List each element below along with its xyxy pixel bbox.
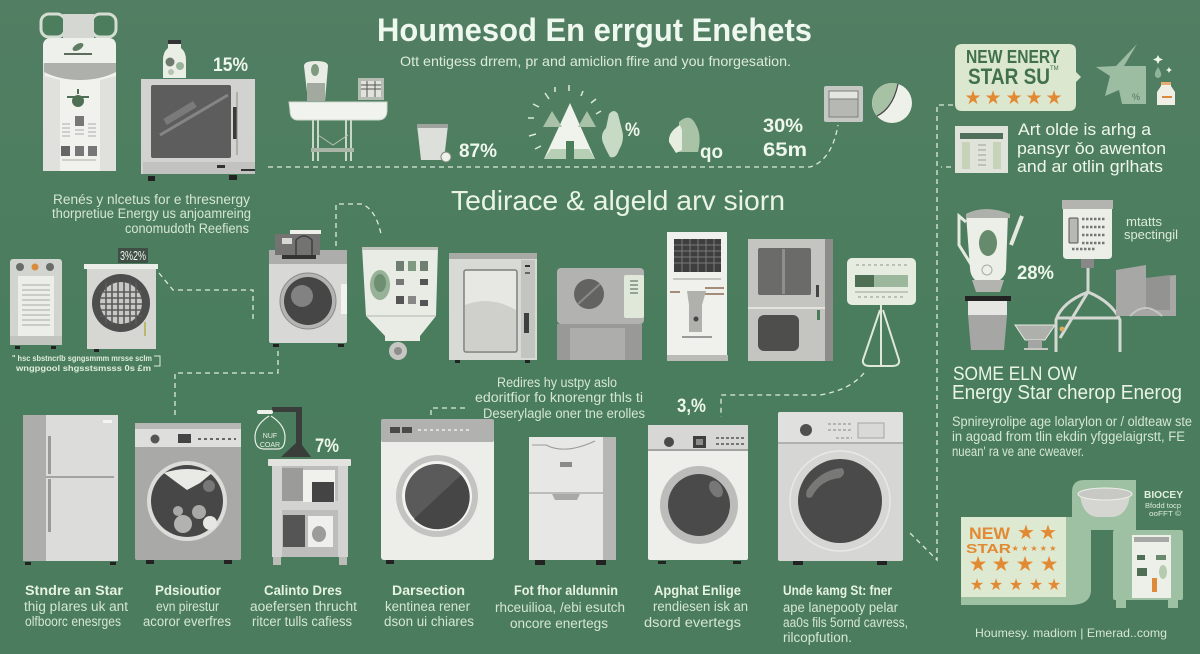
caption: appliance 7: Unde kamg St: fner	[783, 582, 892, 598]
icon: white washer	[381, 419, 494, 564]
star sign panel: ★ ★ ★ ★ ★	[1012, 544, 1056, 553]
caption: appliance 7	[783, 582, 908, 645]
icon: refrigerator	[23, 415, 118, 565]
caption: appliance 5	[495, 582, 625, 631]
green tube support	[961, 480, 1136, 605]
heading: right lower: SOME ELN OW	[953, 363, 1078, 385]
caption: appliance 5: rhceuilioa, /ebi esutch	[495, 600, 625, 615]
caption: appliance 4: Darsection	[392, 582, 465, 598]
stat: 15%: 15%	[213, 54, 248, 76]
icon: fridge unit	[449, 253, 537, 363]
icon: open box	[1116, 265, 1176, 316]
badge: new energy star	[955, 44, 1081, 111]
badge: new energy star: STAR SU	[968, 64, 1050, 89]
title: Houmesod En errgut Enehets	[377, 12, 812, 48]
star sign panel: NEW	[969, 524, 1011, 543]
text block: right top: pansyr ǒo awenton	[1017, 139, 1166, 158]
small caption under fan washer: wngpgool shgsstsmsss 0s £m	[15, 364, 151, 373]
caption: appliance 2: evn pirestur	[156, 599, 219, 614]
stat: 30% 65m: 65m	[763, 139, 807, 161]
stat: 87%: 87%	[459, 140, 497, 162]
label: eco energy: Bfodd tocp	[1145, 503, 1181, 510]
star sign panel: ★	[1017, 522, 1035, 544]
caption: appliance 1: thig pIares uk ant	[24, 599, 128, 614]
stat: percent sign: %	[625, 119, 640, 141]
caption: appliance 6: Apghat Enlige	[654, 582, 741, 598]
stat: 30% 65m: 30%	[763, 115, 803, 137]
star sign panel: ★	[989, 577, 1003, 594]
icon: table with cup and laptop	[289, 61, 387, 161]
text block: center description: Redires hy ustpy aslo	[497, 375, 617, 390]
caption: appliance 6: dsord evertegs	[644, 615, 741, 630]
icon: large washer	[778, 412, 903, 565]
star sign panel: STAR	[966, 541, 1012, 556]
icon: document	[955, 126, 1008, 173]
star sign panel: ★	[1047, 577, 1061, 594]
caption: appliance 5: oncore enertegs	[510, 616, 608, 631]
icon: oven	[748, 239, 833, 361]
bowl	[1078, 488, 1132, 517]
badge: new energy star: ★	[964, 88, 982, 109]
caption: appliance 7: ape lanepooty pelar	[783, 600, 898, 615]
text block: right lower paragraph: Spnireyrolipe age lolarylon or / oldteaw ste	[952, 414, 1192, 429]
star sign panel: ★	[969, 553, 987, 576]
dashed connector lines	[159, 105, 953, 560]
text block: center description: edoritfior fo knorengr thls ti	[475, 390, 643, 405]
caption: appliance 4: dson ui chiares	[384, 614, 474, 629]
icon: blender	[959, 209, 1022, 350]
section heading: Tedirace & algeld arv siorn	[451, 185, 785, 216]
caption: appliance 2: Pdsioutior	[155, 582, 222, 598]
icon: washer middle row	[269, 230, 347, 347]
icon: waste bin	[417, 124, 451, 162]
icon: front-load washer with clothes	[135, 423, 241, 564]
star sign panel: ★	[1016, 553, 1034, 576]
badge: new energy star: ★	[984, 88, 1002, 109]
caption: appliance 6: rendiesen isk an	[653, 599, 748, 614]
icon: lightning star: %	[1132, 92, 1140, 102]
badge: new energy star: NEW ENERY	[966, 47, 1060, 67]
icon: lightning star	[1096, 44, 1146, 104]
star sign panel: ★	[1009, 577, 1023, 594]
subtitle: Ott entigess drrem, pr and amiclion ffire and you fnorgesation.	[400, 53, 791, 69]
icon: gauge circle	[872, 83, 912, 123]
footer credit: Houmesy. madiom | Emerad..comg	[975, 626, 1167, 640]
heading: right lower	[952, 363, 1182, 404]
caption: appliance 3: aoefersen thrucht	[250, 599, 357, 614]
label: matts spending: spectingil	[1124, 228, 1178, 242]
icon: tree	[669, 118, 700, 153]
caption: appliance 1: olfboorc enesrges	[25, 614, 121, 629]
icon: funnel	[1015, 325, 1055, 350]
icon: meter box	[824, 86, 863, 122]
text block: left description	[52, 192, 251, 236]
caption: appliance 7: rilcopfution.	[783, 630, 852, 645]
text block: center description	[475, 375, 645, 421]
star sign panel: ★	[992, 553, 1010, 576]
label: eco energy: BIOCEY	[1144, 490, 1183, 501]
icon: fan washer	[84, 264, 158, 352]
star sign panel: ★	[1040, 553, 1058, 576]
caption: appliance 3: ritcer tulls cafiess	[252, 614, 352, 629]
icon: water cooler	[41, 14, 116, 171]
icon: spray bottle: NUF	[263, 433, 277, 440]
caption: appliance 1: Stndre an Star	[25, 582, 124, 598]
icon: dishwasher	[529, 437, 616, 565]
icon: AC unit	[557, 268, 644, 360]
caption: appliance 2	[143, 582, 231, 629]
caption: appliance 6	[644, 582, 748, 630]
caption: appliance 7: aa0s fils 5ornd cavress,	[783, 615, 908, 630]
star sign panel	[961, 517, 1066, 597]
badge: new energy star: ★	[1045, 88, 1063, 109]
label: matts spending: mtatts	[1126, 214, 1162, 229]
text block: left description: Renés y nlcetus for e thresnergy	[53, 192, 250, 207]
caption: appliance 3	[250, 582, 357, 629]
text block: right top	[1017, 120, 1166, 176]
text block: right lower paragraph	[952, 414, 1192, 459]
text block: left description: conomudoth Reefiens	[125, 221, 249, 236]
star sign panel: ★	[1039, 522, 1057, 544]
label: eco energy: ooFFT ©	[1149, 510, 1182, 518]
text block: right lower paragraph: nuean' ra ve ane cweaver.	[952, 444, 1084, 459]
caption: appliance 4: kentinea rener	[385, 599, 470, 614]
text block: left description: thorpretiue Energy us anjoamreing	[52, 206, 251, 221]
icon: tall AC	[667, 232, 728, 361]
icon: sparkles and jar	[1153, 55, 1175, 105]
icon: compact washer	[648, 425, 748, 564]
badge: new energy star: ★	[1005, 88, 1023, 109]
stat: 3,%: 3,%	[677, 395, 706, 417]
stat: 28%: 28%	[1017, 262, 1054, 284]
badge: new energy star: TM	[1050, 66, 1059, 72]
label: eco energy	[1144, 490, 1183, 518]
icon: peanut shape	[602, 111, 623, 157]
small caption under fan washer	[12, 354, 160, 373]
icon: control panel on stand	[1056, 200, 1120, 352]
icon: hopper panel	[362, 247, 438, 360]
stat: 30% 65m	[763, 115, 807, 161]
text block: right top: Art olde is arhg a	[1018, 120, 1152, 139]
cabinet	[1113, 530, 1183, 608]
illustration: star sign with bowl and cabinet	[961, 480, 1183, 608]
caption: appliance 1	[24, 582, 128, 629]
caption: appliance 3: Calinto Dres	[264, 582, 342, 598]
heading: right lower: Energy Star cherop Enerog	[952, 382, 1182, 404]
small caption under fan washer: " hsc sbstncrlb sgngsmmm mrsse sclm	[12, 354, 152, 363]
icon: spray bottle	[255, 407, 311, 457]
icon: shelf with appliances	[268, 459, 351, 565]
stat: qo: qo	[700, 141, 723, 163]
caption: appliance 2: acoror everfres	[143, 614, 231, 629]
label: 3%2%: 3%2%	[120, 248, 146, 263]
caption: appliance 4	[384, 582, 474, 629]
caption: appliance 5: Fot fhor aldunnin	[514, 582, 618, 598]
icon: heater	[10, 259, 62, 349]
text block: right lower paragraph: in agoad from tlin ekdin yfggelaigrstt, FE	[952, 429, 1185, 444]
star sign panel: ★	[1029, 577, 1043, 594]
icon: spray bottle: COAR	[260, 442, 280, 449]
badge: new energy star: ★	[1025, 88, 1043, 109]
stat: 7%: 7%	[315, 435, 339, 457]
icon: bottle on microwave	[163, 40, 186, 78]
icon: microwave	[141, 79, 255, 181]
text block: right top: and ar otlin grlhats	[1017, 157, 1163, 176]
text block: center description: Deserylagle oner tne erolles	[483, 406, 645, 421]
star sign panel: ★	[970, 577, 984, 594]
label: matts spending	[1124, 214, 1178, 242]
icon: scale display	[847, 258, 916, 366]
icon: tent with rays	[528, 85, 601, 159]
